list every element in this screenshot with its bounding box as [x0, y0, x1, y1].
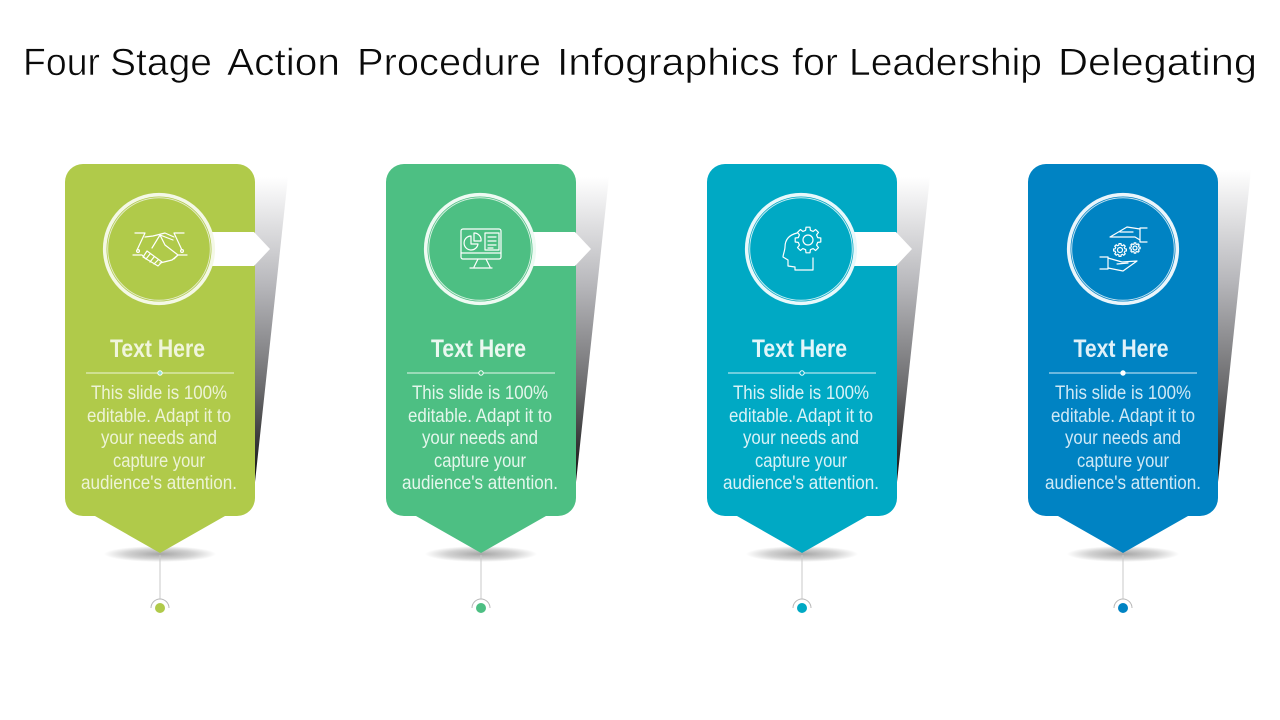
connector and node — [151, 555, 169, 613]
card body — [65, 164, 255, 553]
heading: Text Here — [752, 335, 847, 363]
body text: audience's attention. — [1045, 473, 1201, 494]
title: Four — [23, 42, 100, 84]
card body — [1028, 164, 1218, 553]
pin shadow — [104, 546, 216, 562]
heading: Text Here — [431, 335, 526, 363]
body text: your needs and — [101, 428, 217, 449]
body text: editable. Adapt it to — [408, 406, 552, 427]
body text: your needs and — [422, 428, 538, 449]
gradient shadow wedge — [1213, 170, 1251, 482]
title: Leadership — [849, 42, 1042, 84]
body text: This slide is 100% — [91, 383, 227, 404]
icon ring — [105, 195, 213, 303]
body text — [723, 383, 879, 494]
divider with dot — [728, 371, 876, 375]
pin shadow — [425, 546, 537, 562]
body text: your needs and — [1065, 428, 1181, 449]
panel: stage 1 — [65, 164, 288, 613]
title: Procedure — [357, 42, 541, 84]
arrow tab — [852, 232, 912, 266]
body text — [1045, 383, 1201, 494]
icon ring — [426, 195, 534, 303]
title: for — [792, 42, 838, 84]
title: Infographics — [557, 42, 780, 84]
divider with dot — [407, 371, 555, 375]
body text: your needs and — [743, 428, 859, 449]
heading: Text Here — [110, 335, 205, 363]
body text: This slide is 100% — [412, 383, 548, 404]
title — [23, 42, 1257, 84]
pin shadow — [1067, 546, 1179, 562]
icon: monitor with charts — [461, 229, 501, 268]
body text: audience's attention. — [402, 473, 558, 494]
icon ring — [747, 195, 855, 303]
body text: audience's attention. — [723, 473, 879, 494]
icon: head with gear — [783, 227, 821, 270]
title: Delegating — [1058, 42, 1257, 84]
title: Action — [227, 42, 340, 84]
icon ring — [1069, 195, 1177, 303]
body text: capture your — [1077, 451, 1170, 472]
icon: handshake — [133, 233, 187, 266]
arrow tab — [210, 232, 270, 266]
body text: This slide is 100% — [733, 383, 869, 404]
body text: editable. Adapt it to — [1051, 406, 1195, 427]
body text: audience's attention. — [81, 473, 237, 494]
pin shadow — [746, 546, 858, 562]
body text: editable. Adapt it to — [729, 406, 873, 427]
arrow tab — [531, 232, 591, 266]
gradient shadow wedge — [571, 177, 609, 482]
heading: Text Here — [1074, 335, 1169, 363]
panel: stage 2 — [386, 164, 609, 613]
body text: This slide is 100% — [1055, 383, 1191, 404]
body text: capture your — [113, 451, 206, 472]
card body — [707, 164, 897, 553]
body text: capture your — [755, 451, 848, 472]
body text: capture your — [434, 451, 527, 472]
body text: editable. Adapt it to — [87, 406, 231, 427]
card body — [386, 164, 576, 553]
body text — [81, 383, 237, 494]
divider with dot — [86, 371, 234, 375]
body text — [402, 383, 558, 494]
connector and node — [793, 555, 811, 613]
gradient shadow wedge — [892, 177, 930, 482]
connector and node — [472, 555, 490, 613]
gradient shadow wedge — [250, 177, 288, 482]
title: Stage — [110, 42, 212, 84]
panel: stage 4 — [1028, 164, 1251, 613]
divider with dot — [1049, 371, 1197, 375]
icon: hands with gears — [1100, 227, 1147, 271]
connector and node — [1114, 555, 1132, 613]
panel: stage 3 — [707, 164, 930, 613]
